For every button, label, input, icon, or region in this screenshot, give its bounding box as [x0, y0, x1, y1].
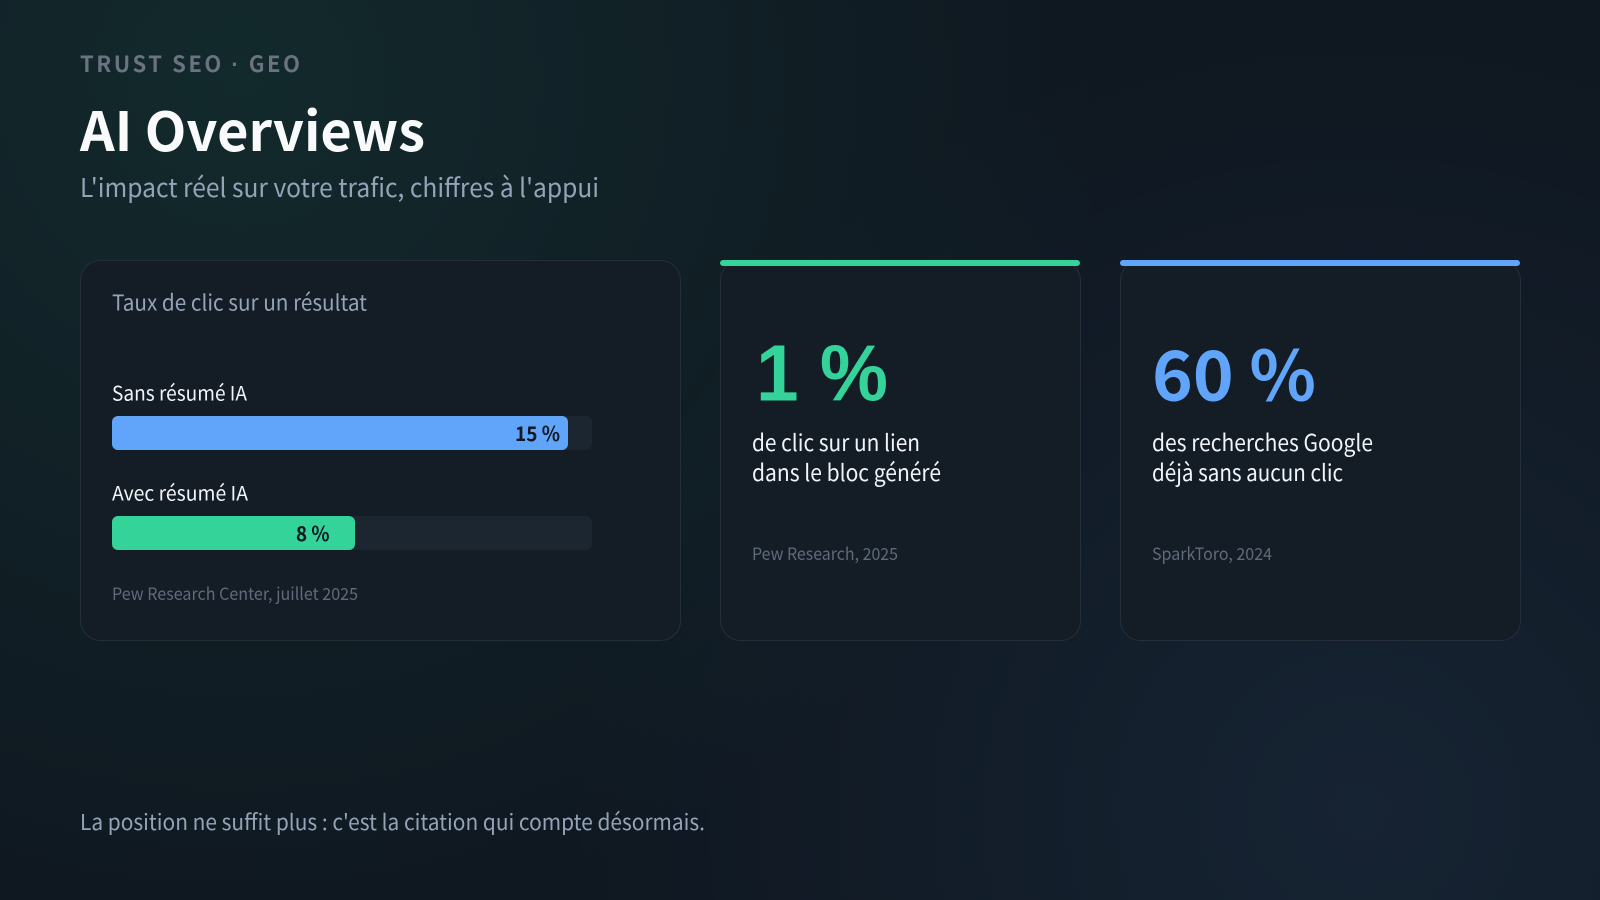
panel: 1 % stat: dans le bloc généré	[752, 454, 941, 488]
bar: without AI summary 15 %: 15 %	[515, 418, 560, 447]
panel: 1 % stat	[720, 260, 1080, 640]
source: SparkToro, 2024	[1152, 540, 1272, 565]
panel: click-through rate	[80, 260, 680, 640]
panel: 60 % stat	[1120, 260, 1520, 640]
title: AI Overviews	[79, 88, 425, 167]
label: with AI summary: Avec résumé IA	[112, 478, 249, 506]
accent bar green	[720, 260, 1080, 266]
source: Pew Research Center, juillet 2025	[112, 580, 358, 605]
stat description: des recherches Google	[1152, 424, 1373, 458]
stat description: de clic sur un lien	[752, 424, 920, 458]
panel: 60 % stat: déjà sans aucun clic	[1152, 454, 1343, 488]
subtitle: L'impact réel sur votre trafic, chiffres à l'appui	[80, 168, 599, 205]
source: Pew Research, 2025	[752, 540, 898, 565]
bar: with AI summary 8 %: 8 %	[296, 518, 330, 547]
closing statement: La position ne suffit plus : c'est la citation qui compte désormais.	[80, 805, 705, 837]
stat number: 1 %	[756, 328, 888, 418]
stat number: 60 %	[1152, 320, 1316, 420]
panel heading: Taux de clic sur un résultat	[112, 286, 367, 318]
accent bar blue	[1120, 260, 1520, 266]
bar: without AI summary 15 %	[112, 416, 592, 450]
bar: with AI summary 8 %	[112, 516, 592, 550]
label: without AI summary: Sans résumé IA	[112, 378, 248, 406]
eyebrow: TRUST SEO · GEO	[80, 47, 300, 79]
